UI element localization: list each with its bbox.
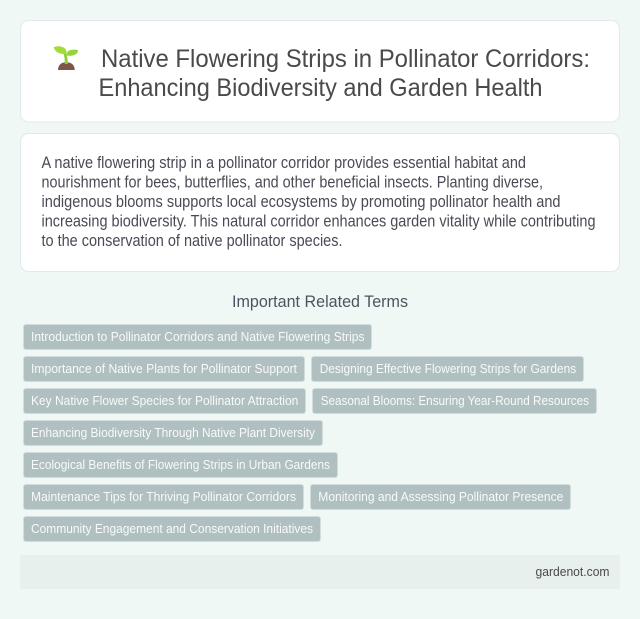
tag: Enhancing Biodiversity Through Native Plant Diversity [31, 425, 316, 440]
panel: description card [20, 134, 620, 272]
tag: Seasonal Blooms: Ensuring Year-Round Resources [321, 393, 589, 408]
footer [20, 555, 620, 589]
title [98, 45, 590, 102]
tag: Key Native Flower Species for Pollinator Attraction [31, 393, 298, 408]
text block: description: indigenous blooms supports local ecosystems by promoting pollinator health and [42, 193, 560, 211]
text block: description: nourishment for bees, butterflies, and other beneficial insects. Planting diverse, [42, 174, 543, 192]
tag: Introduction to Pollinator Corridors and Native Flowering Strips [31, 329, 364, 344]
tag [24, 324, 372, 350]
tag [312, 356, 584, 382]
tag: Monitoring and Assessing Pollinator Presence [318, 489, 563, 504]
tag [24, 484, 304, 510]
text block: description [42, 154, 596, 250]
tag [24, 452, 338, 478]
title: Enhancing Biodiversity and Garden Health [98, 74, 542, 102]
tag [310, 484, 570, 510]
tag [24, 516, 320, 542]
footer: gardenot.com [536, 564, 610, 579]
tag: Importance of Native Plants for Pollinator Support [31, 361, 297, 376]
tag: Maintenance Tips for Thriving Pollinator Corridors [31, 489, 296, 504]
icon: seedling [54, 46, 78, 70]
text block: description: to the conservation of native pollinator species. [42, 232, 342, 250]
title: Native Flowering Strips in Pollinator Corridors: [101, 45, 590, 73]
panel: title card [20, 20, 620, 122]
tag: Designing Effective Flowering Strips for Gardens [320, 361, 576, 376]
tag [312, 388, 596, 414]
tag [24, 356, 304, 382]
heading: related terms: Important Related Terms [232, 293, 408, 311]
tag list [24, 324, 596, 542]
tag [24, 420, 322, 446]
tag: Community Engagement and Conservation Initiatives [31, 521, 313, 536]
tag [24, 388, 306, 414]
tag: Ecological Benefits of Flowering Strips in Urban Gardens [31, 457, 330, 472]
text block: description: A native flowering strip in a pollinator corridor provides essential habitat and [42, 154, 526, 172]
